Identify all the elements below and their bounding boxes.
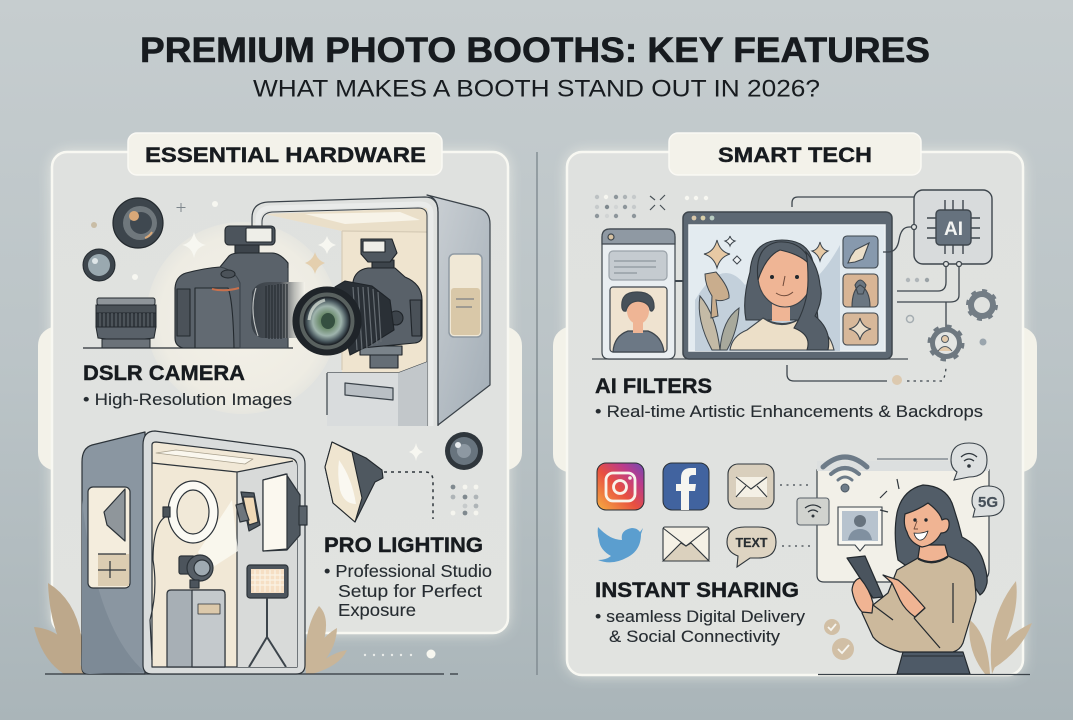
icon: facebook bbox=[663, 463, 709, 510]
icon: lens side view bbox=[96, 298, 156, 348]
AI chip box: AI bbox=[944, 219, 963, 240]
panel: essential hardware bbox=[38, 133, 522, 633]
icon: gear bbox=[968, 290, 996, 320]
illustration: lighting booth bbox=[82, 431, 307, 674]
backdrop mountains bbox=[695, 245, 840, 351]
filter thumbnails bbox=[843, 236, 878, 345]
phone bbox=[847, 556, 883, 598]
ground line right bbox=[818, 674, 1030, 676]
icon: wifi bubble bbox=[951, 443, 987, 480]
ring light bbox=[150, 481, 218, 660]
right hand bbox=[883, 575, 925, 617]
heading tab: essential hardware: ESSENTIAL HARDWARE bbox=[145, 143, 426, 167]
icon: 5G bubble: 5G bbox=[978, 494, 998, 511]
illustration: woman with phone bbox=[847, 479, 987, 674]
text block: AI filters: • Real-time Artistic Enhancements & Backdrops bbox=[595, 402, 983, 421]
icon: text bubble bbox=[727, 527, 776, 567]
icon: softbox light bbox=[325, 442, 383, 522]
text block: pro lighting: Exposure bbox=[338, 600, 416, 620]
big screen window bbox=[683, 212, 892, 359]
small camera on stand bbox=[167, 555, 225, 667]
leaves far right bbox=[969, 581, 1032, 674]
icon: lens small right bbox=[445, 432, 483, 470]
icon: rear DSLR camera bbox=[175, 226, 305, 348]
text block: DSLR camera bbox=[83, 361, 292, 409]
sweater seams bbox=[873, 583, 953, 648]
sparkles near camera bbox=[91, 201, 336, 280]
AI chip box bbox=[914, 190, 992, 264]
text block: AI filters: AI FILTERS bbox=[595, 374, 712, 398]
illustration: booth background top bbox=[252, 195, 490, 426]
dot grid bbox=[451, 485, 478, 515]
sparkles bbox=[704, 236, 828, 268]
text block: instant sharing: • seamless Digital Delivery bbox=[595, 607, 806, 626]
text block: pro lighting bbox=[324, 533, 492, 620]
plant bbox=[699, 272, 739, 350]
subtitle: WHAT MAKES A BOOTH STAND OUT IN 2026? bbox=[253, 76, 820, 102]
connector lines bbox=[787, 197, 962, 381]
camera stand bbox=[327, 362, 427, 426]
pagination dots bbox=[364, 650, 436, 658]
heading tab: smart tech bbox=[669, 133, 921, 175]
icon: mail tile bbox=[728, 464, 774, 509]
text block: DSLR camera: • High-Resolution Images bbox=[83, 390, 292, 409]
woman portrait bbox=[730, 240, 834, 350]
left hand bbox=[852, 578, 873, 613]
icon: instagram bbox=[597, 463, 644, 510]
halo behind camera bbox=[146, 222, 338, 414]
center divider bbox=[536, 152, 538, 675]
text block: AI filters bbox=[595, 374, 983, 421]
side window with reflected light bbox=[88, 487, 130, 588]
ground line left bbox=[45, 673, 458, 675]
text block: DSLR camera: DSLR CAMERA bbox=[83, 361, 245, 385]
icon: text bubble: TEXT bbox=[736, 536, 768, 550]
small window with portrait bbox=[602, 229, 690, 359]
icon: photo card bbox=[838, 507, 882, 551]
person portrait bbox=[613, 292, 664, 352]
text block: pro lighting: Setup for Perfect bbox=[338, 581, 482, 601]
LED panel on tripod bbox=[247, 565, 288, 667]
icon: 5G bubble bbox=[972, 486, 1004, 517]
text block: instant sharing: INSTANT SHARING bbox=[595, 578, 799, 602]
heading tab: essential hardware bbox=[128, 133, 442, 175]
icon: floating lens large bbox=[113, 198, 163, 248]
icon: envelope bbox=[663, 527, 709, 561]
icon: wifi tile bbox=[797, 498, 829, 525]
text block: pro lighting: • Professional Studio bbox=[324, 561, 492, 581]
sharing panel bbox=[817, 459, 989, 582]
text block: instant sharing bbox=[595, 578, 806, 646]
panel: smart tech bbox=[553, 133, 1037, 675]
icon: gear with user bbox=[929, 326, 963, 360]
booth side window bbox=[449, 254, 482, 337]
sparkle bbox=[409, 443, 423, 461]
text block: pro lighting: PRO LIGHTING bbox=[324, 533, 483, 557]
icon: wifi large bbox=[823, 457, 867, 492]
heading tab: smart tech: SMART TECH bbox=[718, 143, 872, 167]
title: PREMIUM PHOTO BOOTHS: KEY FEATURES bbox=[140, 31, 930, 70]
dotted connector bbox=[384, 472, 433, 519]
icon: front DSLR camera bbox=[293, 239, 422, 368]
text block: instant sharing: & Social Connectivity bbox=[609, 627, 781, 646]
check badges bbox=[824, 619, 854, 660]
icon: twitter bird bbox=[598, 527, 643, 562]
sparkle lines bbox=[880, 479, 899, 512]
decorations: top right panel bbox=[595, 195, 986, 346]
light beam bbox=[198, 500, 238, 571]
icon: floating lens small bbox=[83, 249, 115, 281]
connection dot bbox=[892, 375, 902, 385]
shelf line bbox=[83, 347, 293, 349]
shelf line right bbox=[592, 358, 908, 360]
leaves right bbox=[305, 606, 347, 674]
leaves left bbox=[34, 583, 84, 674]
softbox in booth bbox=[263, 474, 307, 551]
small fill light bbox=[236, 492, 260, 531]
dotted connectors bbox=[780, 485, 812, 546]
